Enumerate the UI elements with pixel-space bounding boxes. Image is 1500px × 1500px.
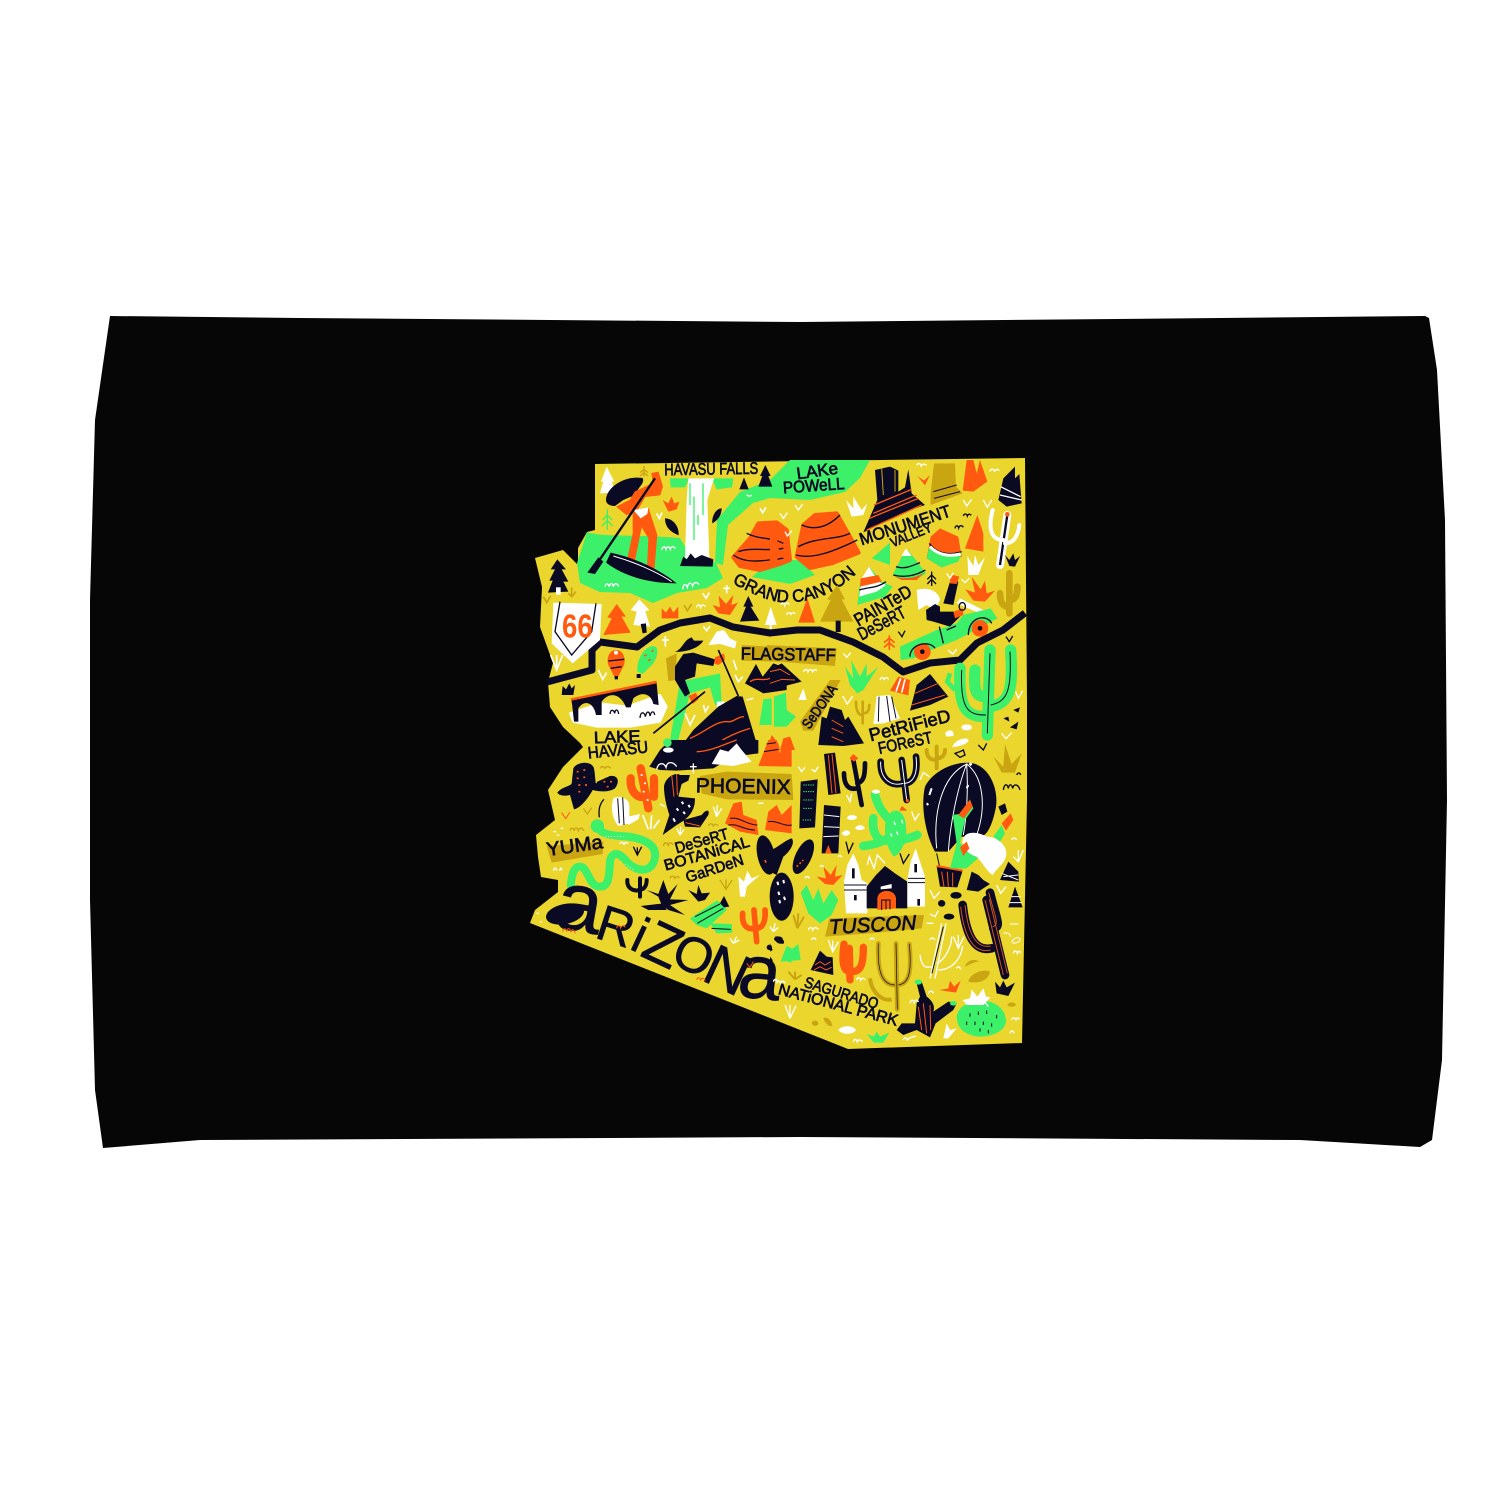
Flagstaff banner bbox=[742, 645, 780, 662]
navy plant bbox=[1005, 553, 1020, 567]
title: Arizona bbox=[544, 853, 786, 1018]
label: Desert Botanical Garden: GaRDeN bbox=[684, 852, 746, 886]
navy pine trees bbox=[739, 465, 772, 489]
navy tree at edge bbox=[548, 559, 568, 595]
white outlined plant bbox=[643, 815, 659, 829]
navy sprigs bbox=[846, 842, 909, 863]
south-east region bbox=[767, 728, 1023, 1043]
hot air balloon cactus bbox=[923, 763, 1013, 887]
brown saguaro bbox=[961, 893, 1007, 975]
large green saguaro bbox=[947, 650, 1011, 735]
painted hill one bbox=[857, 567, 893, 605]
navy pine tree bbox=[740, 596, 759, 622]
green lake and river bbox=[577, 460, 870, 603]
Tuscon banner bbox=[825, 915, 924, 937]
label: Grand Canyon: GRAND CANYON bbox=[734, 565, 856, 602]
label: Lake Powell: LAKe bbox=[795, 459, 839, 483]
navy rock group bbox=[818, 707, 864, 746]
navy mountain bbox=[745, 663, 787, 693]
orange agave bbox=[939, 981, 961, 993]
green barrel cactus bbox=[957, 988, 1006, 1037]
label: Desert Botanical Garden: DeSeRT bbox=[673, 826, 731, 857]
green arm cactus bbox=[863, 790, 917, 857]
orange agave bbox=[965, 577, 995, 602]
title: Arizona: Z bbox=[633, 908, 693, 982]
London bridge bbox=[571, 681, 659, 722]
label: Phoenix: PHOENIX bbox=[696, 774, 791, 799]
white pebbles bbox=[842, 815, 865, 836]
orange cone edges bbox=[767, 735, 795, 750]
gold plants bbox=[788, 913, 804, 979]
route 66 road bbox=[547, 613, 1025, 682]
white outlined cactus bbox=[920, 923, 963, 978]
label: Havasu Falls: HAVASU FALLS bbox=[664, 459, 758, 479]
orange small tree bbox=[884, 635, 895, 650]
label: Painted Desert: PAINTeD bbox=[850, 581, 915, 630]
white tree bbox=[765, 607, 777, 629]
gold large tree bbox=[820, 585, 853, 632]
orange cactus bbox=[631, 768, 654, 808]
Grand Canyon baseline guide bbox=[732, 570, 860, 603]
white striped cactus bbox=[612, 797, 640, 826]
label: Tuscon: TUSCON bbox=[828, 911, 917, 939]
brick column bbox=[824, 753, 841, 795]
small gold marks bbox=[570, 767, 732, 889]
navy bottom cactus bbox=[897, 979, 957, 1037]
yellow Arizona state map bbox=[530, 458, 1027, 1049]
canyon rock left edge bbox=[770, 522, 780, 567]
navy plants bbox=[955, 743, 1021, 790]
gold cactus bbox=[1000, 573, 1017, 613]
mountain peak base bbox=[649, 738, 758, 771]
navy and orange small trees bbox=[927, 572, 936, 586]
gold cactus bbox=[856, 702, 869, 723]
navy prickly pear bbox=[557, 763, 618, 809]
orange cactus bbox=[843, 944, 863, 980]
painted hill three bbox=[927, 528, 962, 567]
navy blobs near Tuscon bbox=[770, 936, 784, 980]
orange plant bbox=[663, 497, 679, 512]
label: Monument Valley: VALLEY bbox=[888, 520, 934, 550]
white pine tree with trunk bbox=[631, 599, 650, 633]
striped navy butte bbox=[998, 467, 1022, 507]
Yuma banner bbox=[547, 842, 603, 863]
navy dots bbox=[1003, 707, 1020, 729]
white striped navy cactus bbox=[881, 757, 916, 802]
label: Desert Botanical Garden bbox=[662, 826, 752, 886]
green plant bbox=[845, 660, 878, 693]
label: Painted Desert bbox=[850, 581, 915, 644]
small marks bbox=[605, 495, 753, 700]
title: Arizona: a bbox=[549, 853, 611, 953]
label: Yuma: YUMa bbox=[545, 832, 604, 861]
lake Havasu water bbox=[570, 695, 667, 727]
north-east region bbox=[741, 459, 1023, 750]
Havasu waterfall bbox=[670, 478, 733, 567]
orange rocks bbox=[725, 802, 792, 835]
small navy marks bbox=[955, 514, 971, 528]
label: Sagurado National Park: NATiONAL PARK bbox=[776, 981, 900, 1030]
gold tall saguaro bbox=[870, 943, 910, 1009]
north-west region bbox=[543, 459, 790, 750]
orange cactus bbox=[743, 910, 765, 942]
white pebble bbox=[838, 1026, 856, 1034]
title: Arizona: a bbox=[734, 928, 786, 1018]
navy saguaro bbox=[844, 754, 865, 805]
navy striped rock bbox=[910, 674, 948, 711]
green snake bbox=[571, 799, 655, 887]
green small plant bbox=[782, 946, 792, 963]
label: Sedona: SeDONA bbox=[800, 682, 841, 732]
gold plants top bbox=[927, 747, 945, 768]
white pebbles bbox=[961, 724, 972, 730]
small white marks bbox=[780, 464, 1023, 739]
green plant bbox=[801, 885, 838, 923]
orange cone rock bbox=[758, 740, 792, 767]
label: Havasu: HAVASU bbox=[587, 737, 649, 763]
white marks bbox=[773, 767, 1023, 1042]
label: Monument Valley: MONUMENT bbox=[857, 501, 954, 549]
striped tower bbox=[822, 805, 841, 853]
green mesa bbox=[759, 695, 783, 727]
Monument Valley butte bbox=[863, 467, 925, 532]
navy prickly pear bbox=[767, 836, 818, 921]
hiker bbox=[653, 637, 738, 750]
mountain peak bbox=[678, 696, 758, 750]
orange butte bbox=[963, 460, 987, 492]
white plant bbox=[943, 1023, 957, 1038]
navy plants bbox=[627, 847, 710, 915]
title: Arizona: O bbox=[664, 922, 723, 989]
label: Lake Powell bbox=[782, 459, 845, 497]
label: Flagstaff: FLAGSTAFF bbox=[741, 643, 836, 665]
painted hill two bbox=[893, 548, 926, 580]
gold agave bbox=[993, 744, 1022, 773]
white pine tree bbox=[600, 467, 616, 493]
mission church bbox=[844, 848, 925, 913]
navy agave bbox=[995, 981, 1015, 996]
canyon rock left bbox=[733, 522, 790, 570]
white pebbles lower bbox=[945, 730, 969, 747]
striped orange rock bbox=[890, 677, 910, 695]
gold blobs bbox=[812, 960, 1016, 1026]
white plant bbox=[846, 497, 867, 517]
label: Painted Desert: DeSeRT bbox=[854, 602, 909, 644]
white saguaro bbox=[991, 510, 1019, 565]
green jeep bbox=[900, 575, 997, 660]
green small mesa bbox=[781, 944, 801, 962]
gold tree bbox=[640, 466, 648, 477]
falling leaves bbox=[665, 508, 722, 535]
label: Petrified: PetRiFieD bbox=[867, 706, 952, 745]
orange agave bbox=[713, 595, 738, 615]
route 66 sign bbox=[552, 602, 602, 663]
mesa and rock continuation bbox=[774, 693, 796, 727]
orange lines on mountain bbox=[770, 669, 795, 683]
black towel bbox=[90, 316, 1447, 1148]
orange spike rock bbox=[965, 515, 983, 552]
green barrel cactus bbox=[690, 896, 732, 933]
navy prickly cactus left pad bbox=[753, 834, 779, 876]
label: Forest: FOReST bbox=[876, 728, 934, 758]
white cloud bbox=[708, 630, 737, 648]
orange agave bbox=[817, 865, 843, 885]
title: Arizona: N bbox=[694, 932, 760, 1009]
small gold sprigs bbox=[543, 587, 692, 611]
orange crown bbox=[662, 607, 678, 618]
label: Lake Powell: POWeLL bbox=[782, 474, 845, 497]
hot air balloons bbox=[608, 646, 657, 679]
paddleboard bbox=[606, 553, 677, 583]
Phoenix banner bbox=[700, 772, 793, 800]
navy crown bbox=[562, 683, 575, 695]
orange plant bbox=[917, 475, 930, 485]
label: Lake: LAKE bbox=[593, 727, 641, 747]
paddle boarder woman bbox=[587, 472, 663, 575]
small white sprigs bbox=[551, 507, 766, 725]
small white marks bbox=[537, 763, 785, 983]
white plant bbox=[738, 871, 760, 897]
navy sprigs bbox=[898, 631, 1013, 642]
canyon rock right bbox=[796, 513, 859, 568]
white outlined ovals bbox=[1003, 924, 1020, 943]
label: Desert Botanical Garden: BOTANiCAL bbox=[662, 834, 752, 875]
rock stripes bbox=[1002, 873, 1022, 903]
green triangle bbox=[872, 543, 890, 565]
gold butte bbox=[931, 463, 963, 505]
skyscraper bbox=[799, 779, 818, 828]
navy striped and dotted cactus bbox=[663, 774, 709, 835]
small orange marks bbox=[562, 812, 753, 981]
label: Sagurado National Park: SAGURADO bbox=[802, 974, 881, 1013]
Flagstaff banner bbox=[767, 645, 837, 666]
route 66 sign: 66 bbox=[562, 608, 593, 645]
navy rock with zigzag bbox=[811, 951, 833, 975]
white triangle bbox=[798, 688, 807, 700]
navy rocks and boulders bbox=[938, 862, 1023, 920]
Sedona banner bbox=[800, 680, 841, 731]
navy mountain continuation bbox=[770, 663, 802, 692]
white plant bbox=[967, 555, 985, 575]
striped white rock bbox=[873, 695, 900, 724]
south-west region bbox=[537, 737, 793, 1018]
orange pine tree bbox=[603, 604, 631, 635]
orange tree bbox=[798, 598, 815, 623]
title: Arizona: R bbox=[590, 894, 642, 959]
title: Arizona: i bbox=[624, 908, 657, 963]
green outline tree bbox=[602, 509, 613, 530]
green plant bottom bbox=[867, 1032, 889, 1043]
